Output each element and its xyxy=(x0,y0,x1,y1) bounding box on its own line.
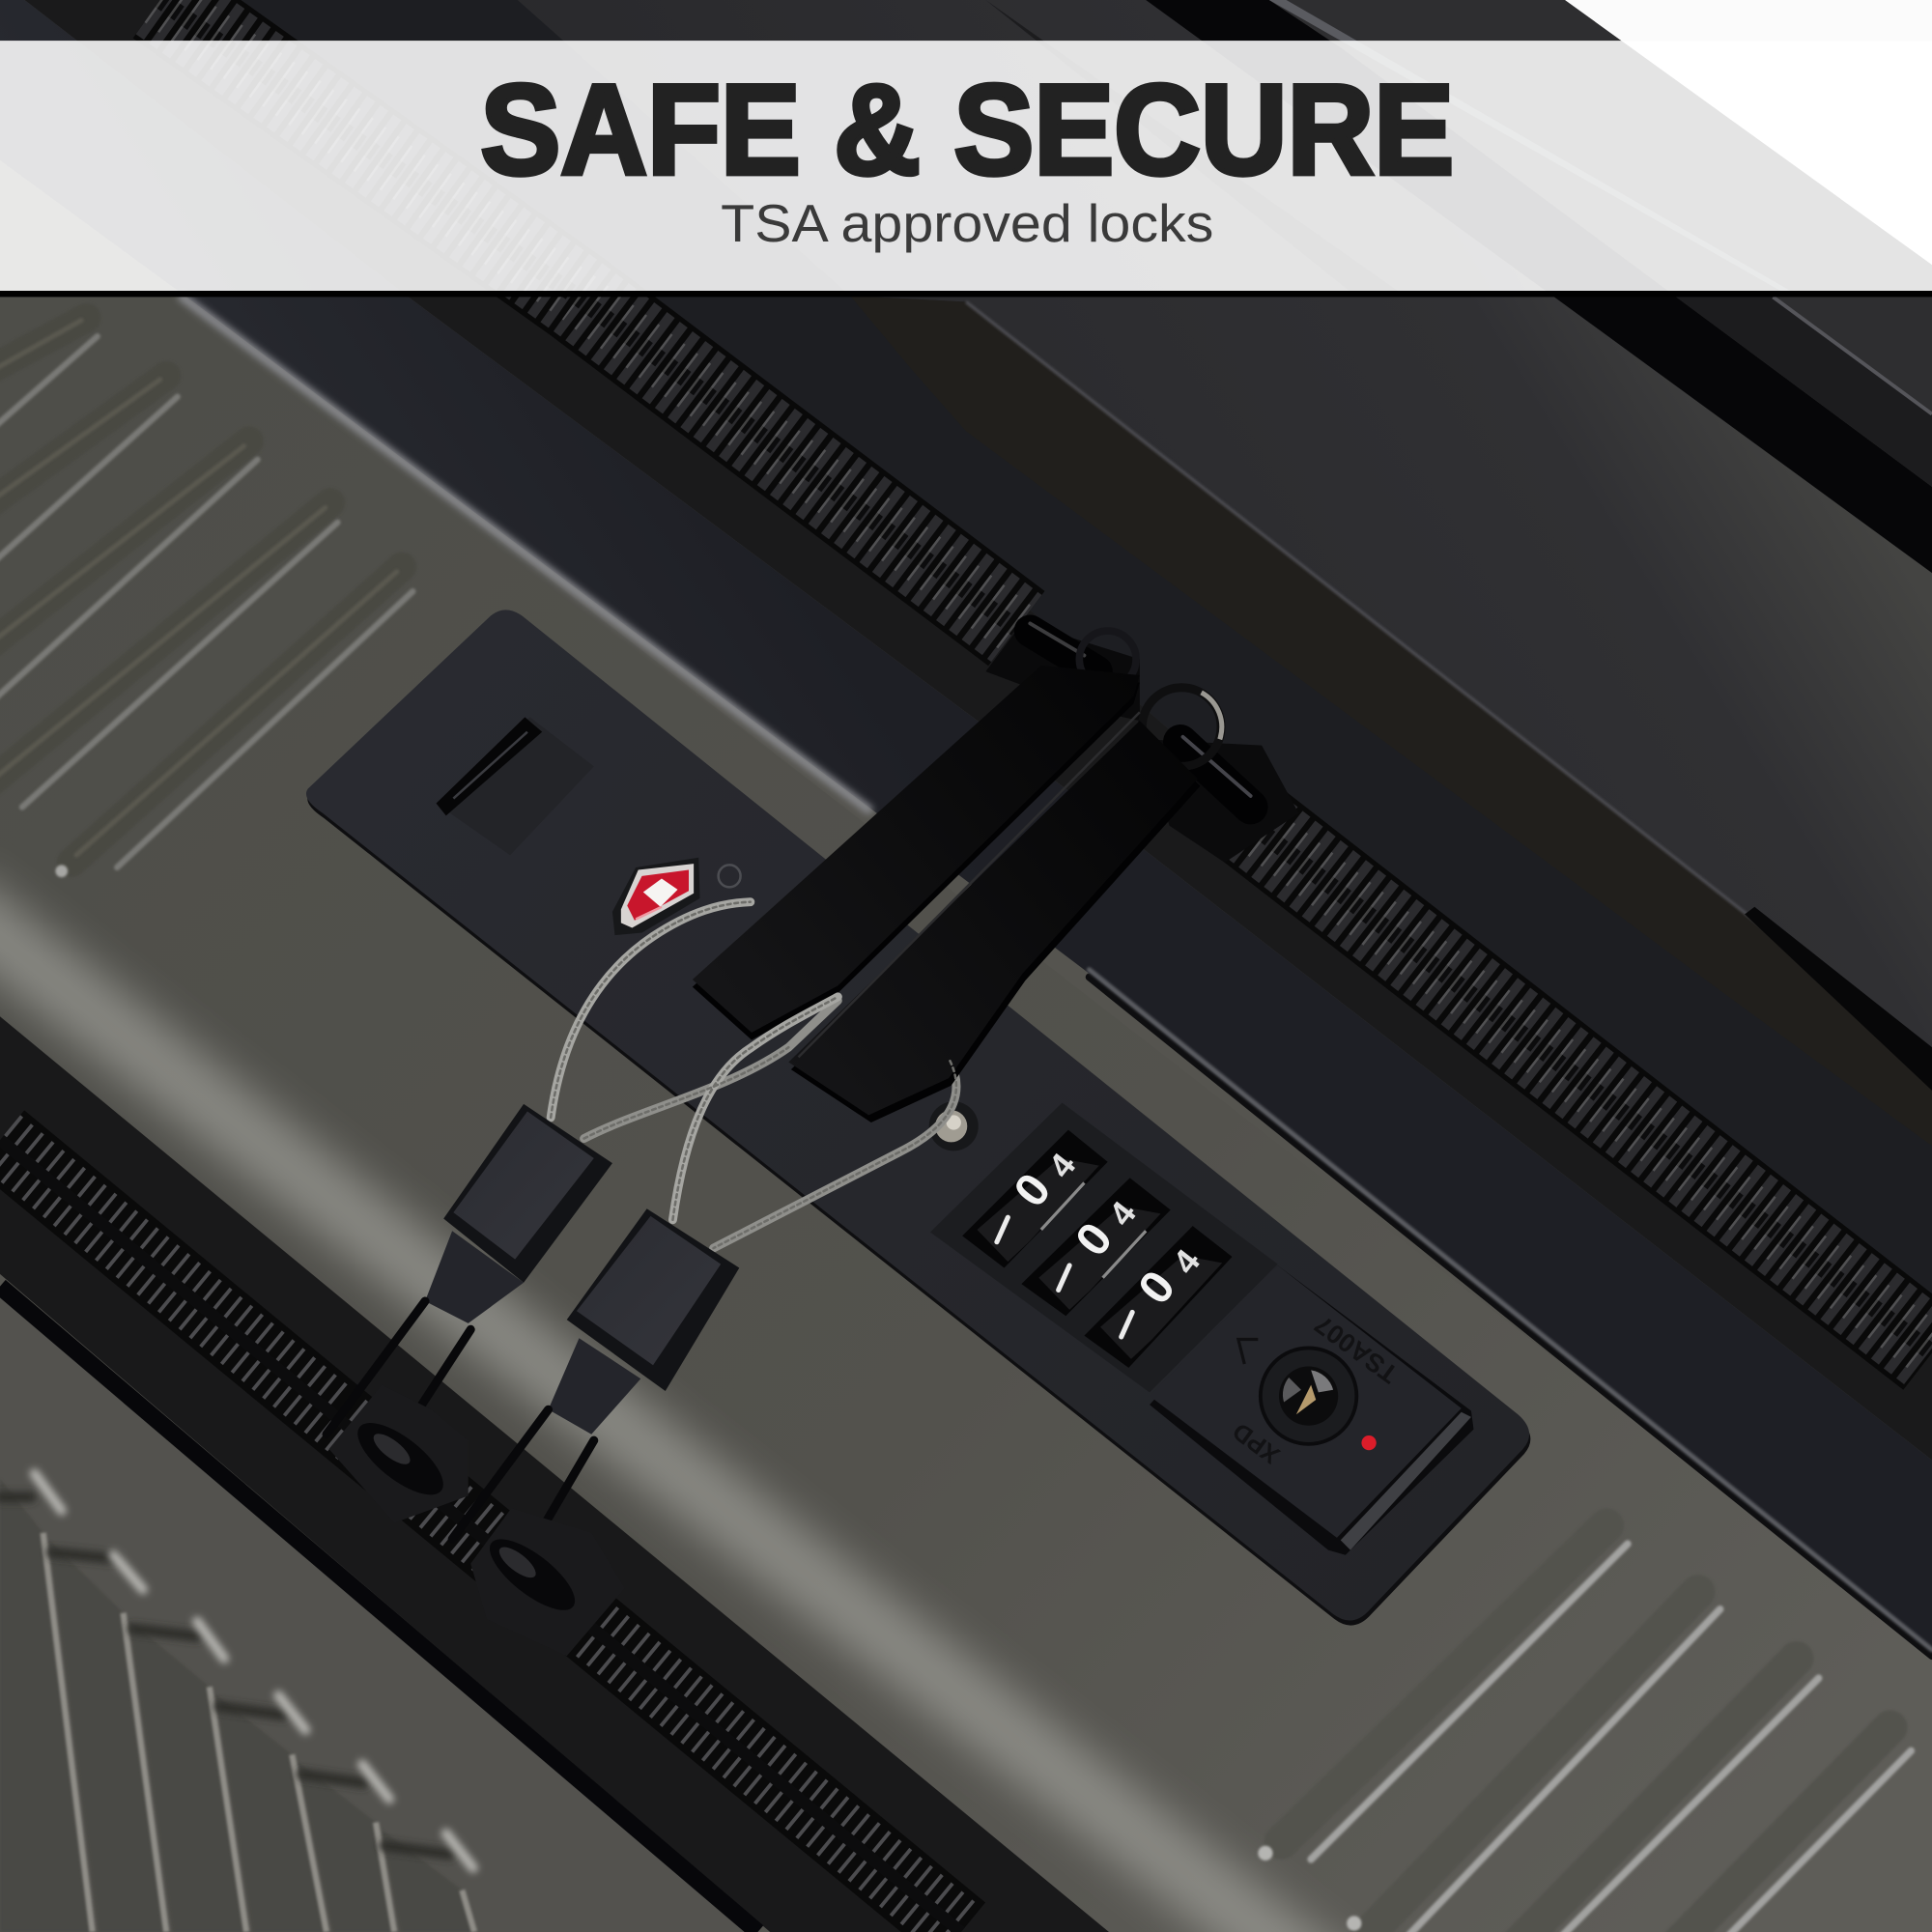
combination dials xyxy=(962,1130,1233,1368)
maker marking: XPD xyxy=(1228,1417,1285,1468)
dial 1 xyxy=(962,1130,1108,1267)
icon: TSA red diamond logo xyxy=(612,858,741,935)
top banner xyxy=(0,41,1932,297)
keyhole xyxy=(1261,1348,1356,1444)
dial 2: 0 xyxy=(1065,1213,1122,1265)
zipper slider xyxy=(470,1508,625,1656)
plate slot xyxy=(437,717,594,855)
lock shackle xyxy=(327,1301,470,1435)
shell ribs bottom right xyxy=(1258,1525,1911,1932)
subtitle: TSA approved locks xyxy=(721,193,1213,253)
upper zipper slider left xyxy=(985,622,1140,721)
TSA cable lock one xyxy=(327,1104,612,1523)
title: SAFE & SECURE xyxy=(480,59,1454,202)
steel cable back strands xyxy=(584,1001,956,1248)
dial 1: 0 xyxy=(1004,1164,1061,1216)
brown strip on upper panel xyxy=(850,296,1932,1146)
zipper slider xyxy=(329,1385,469,1523)
lock mounting plate xyxy=(306,610,1530,1626)
lock body xyxy=(567,1208,739,1391)
dial 2 xyxy=(1021,1178,1171,1316)
banner bottom rule xyxy=(0,291,1932,297)
zipper pull tab one xyxy=(693,666,1140,1040)
banner translucent panel xyxy=(0,41,1932,291)
indicator red dot xyxy=(1361,1435,1377,1450)
lower shell xyxy=(0,1287,757,1932)
dial 3: 4 xyxy=(1165,1242,1208,1281)
frame edge highlights xyxy=(183,297,1932,1656)
upper zipper slider right xyxy=(1142,688,1298,863)
dial 3: 0 xyxy=(1128,1262,1185,1314)
upper zipper xyxy=(25,0,1932,1460)
key code marking: TSA007 xyxy=(1309,1310,1404,1389)
zipper pull tab two xyxy=(788,712,1200,1122)
strip end notch xyxy=(1745,907,1932,1091)
lower zipper xyxy=(0,1016,1109,1932)
shell ribs upper left xyxy=(0,318,412,877)
rivet xyxy=(929,1101,979,1151)
dial 3 xyxy=(1084,1226,1233,1368)
dial 1: 4 xyxy=(1041,1146,1083,1185)
lower-left vertical ribs xyxy=(0,1474,474,1932)
combination lock recess xyxy=(930,1103,1278,1392)
dark recessed band beside zipper xyxy=(234,0,1932,1306)
key lock module xyxy=(1150,1265,1474,1555)
lock shackle xyxy=(452,1409,594,1539)
shell highlight band xyxy=(0,899,1368,1932)
arrow mark xyxy=(1238,1339,1258,1364)
TSA cable lock two xyxy=(452,1208,739,1656)
lock body xyxy=(443,1104,612,1283)
steel cable front strands xyxy=(551,902,956,1248)
dial 2: 4 xyxy=(1101,1194,1144,1234)
panel edge highlight xyxy=(966,301,1932,1060)
